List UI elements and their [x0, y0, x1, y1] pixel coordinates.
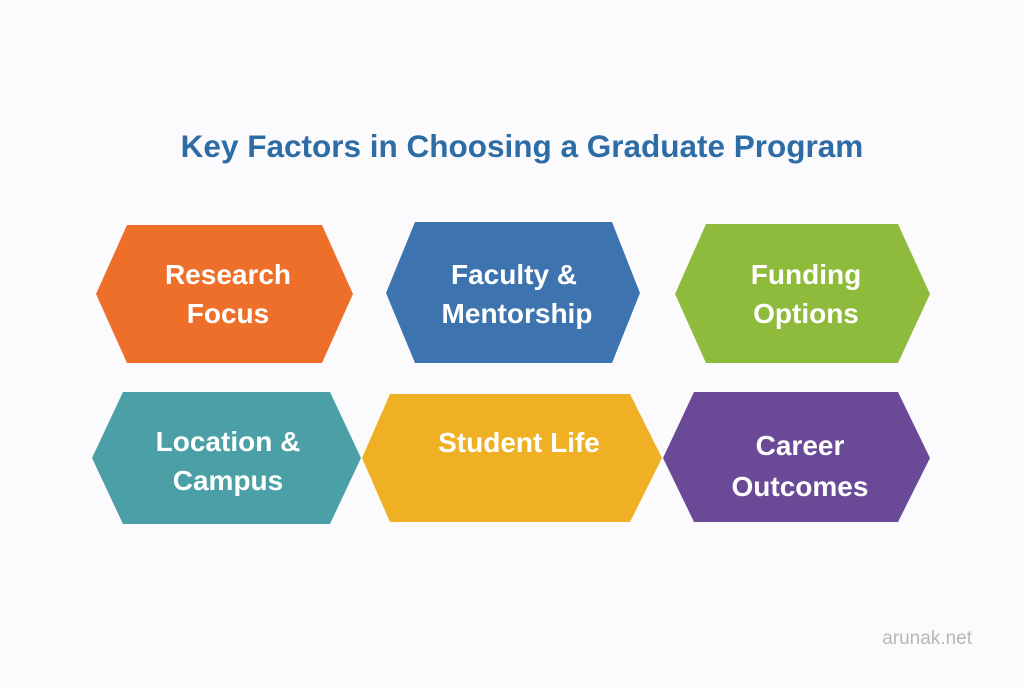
hexagon: faculty & mentorship: Mentorship — [442, 298, 592, 329]
hexagon: research focus: Research — [165, 259, 291, 290]
hexagon: location & campus — [92, 392, 361, 524]
hexagon: location & campus: Campus — [173, 465, 283, 496]
hexagon: funding options — [675, 224, 930, 363]
hexagon: research focus: Focus — [187, 298, 269, 329]
hexagon: career outcomes: Career — [756, 430, 844, 461]
hexagon: career outcomes: Outcomes — [732, 471, 868, 502]
hexagon: location & campus: Location & — [156, 426, 300, 457]
watermark: arunak.net — [882, 628, 973, 649]
hexagon: career outcomes — [663, 392, 930, 522]
hexagon: student life: Student Life — [438, 427, 600, 458]
hexagon: funding options: Options — [753, 298, 859, 329]
title: Key Factors in Choosing a Graduate Program — [181, 128, 863, 164]
hexagon: faculty & mentorship — [386, 222, 640, 363]
hexagon: faculty & mentorship: Faculty & — [451, 259, 577, 290]
hexagon: research focus — [96, 225, 353, 363]
hexagon: funding options: Funding — [751, 259, 861, 290]
hexagon: student life — [362, 394, 662, 522]
